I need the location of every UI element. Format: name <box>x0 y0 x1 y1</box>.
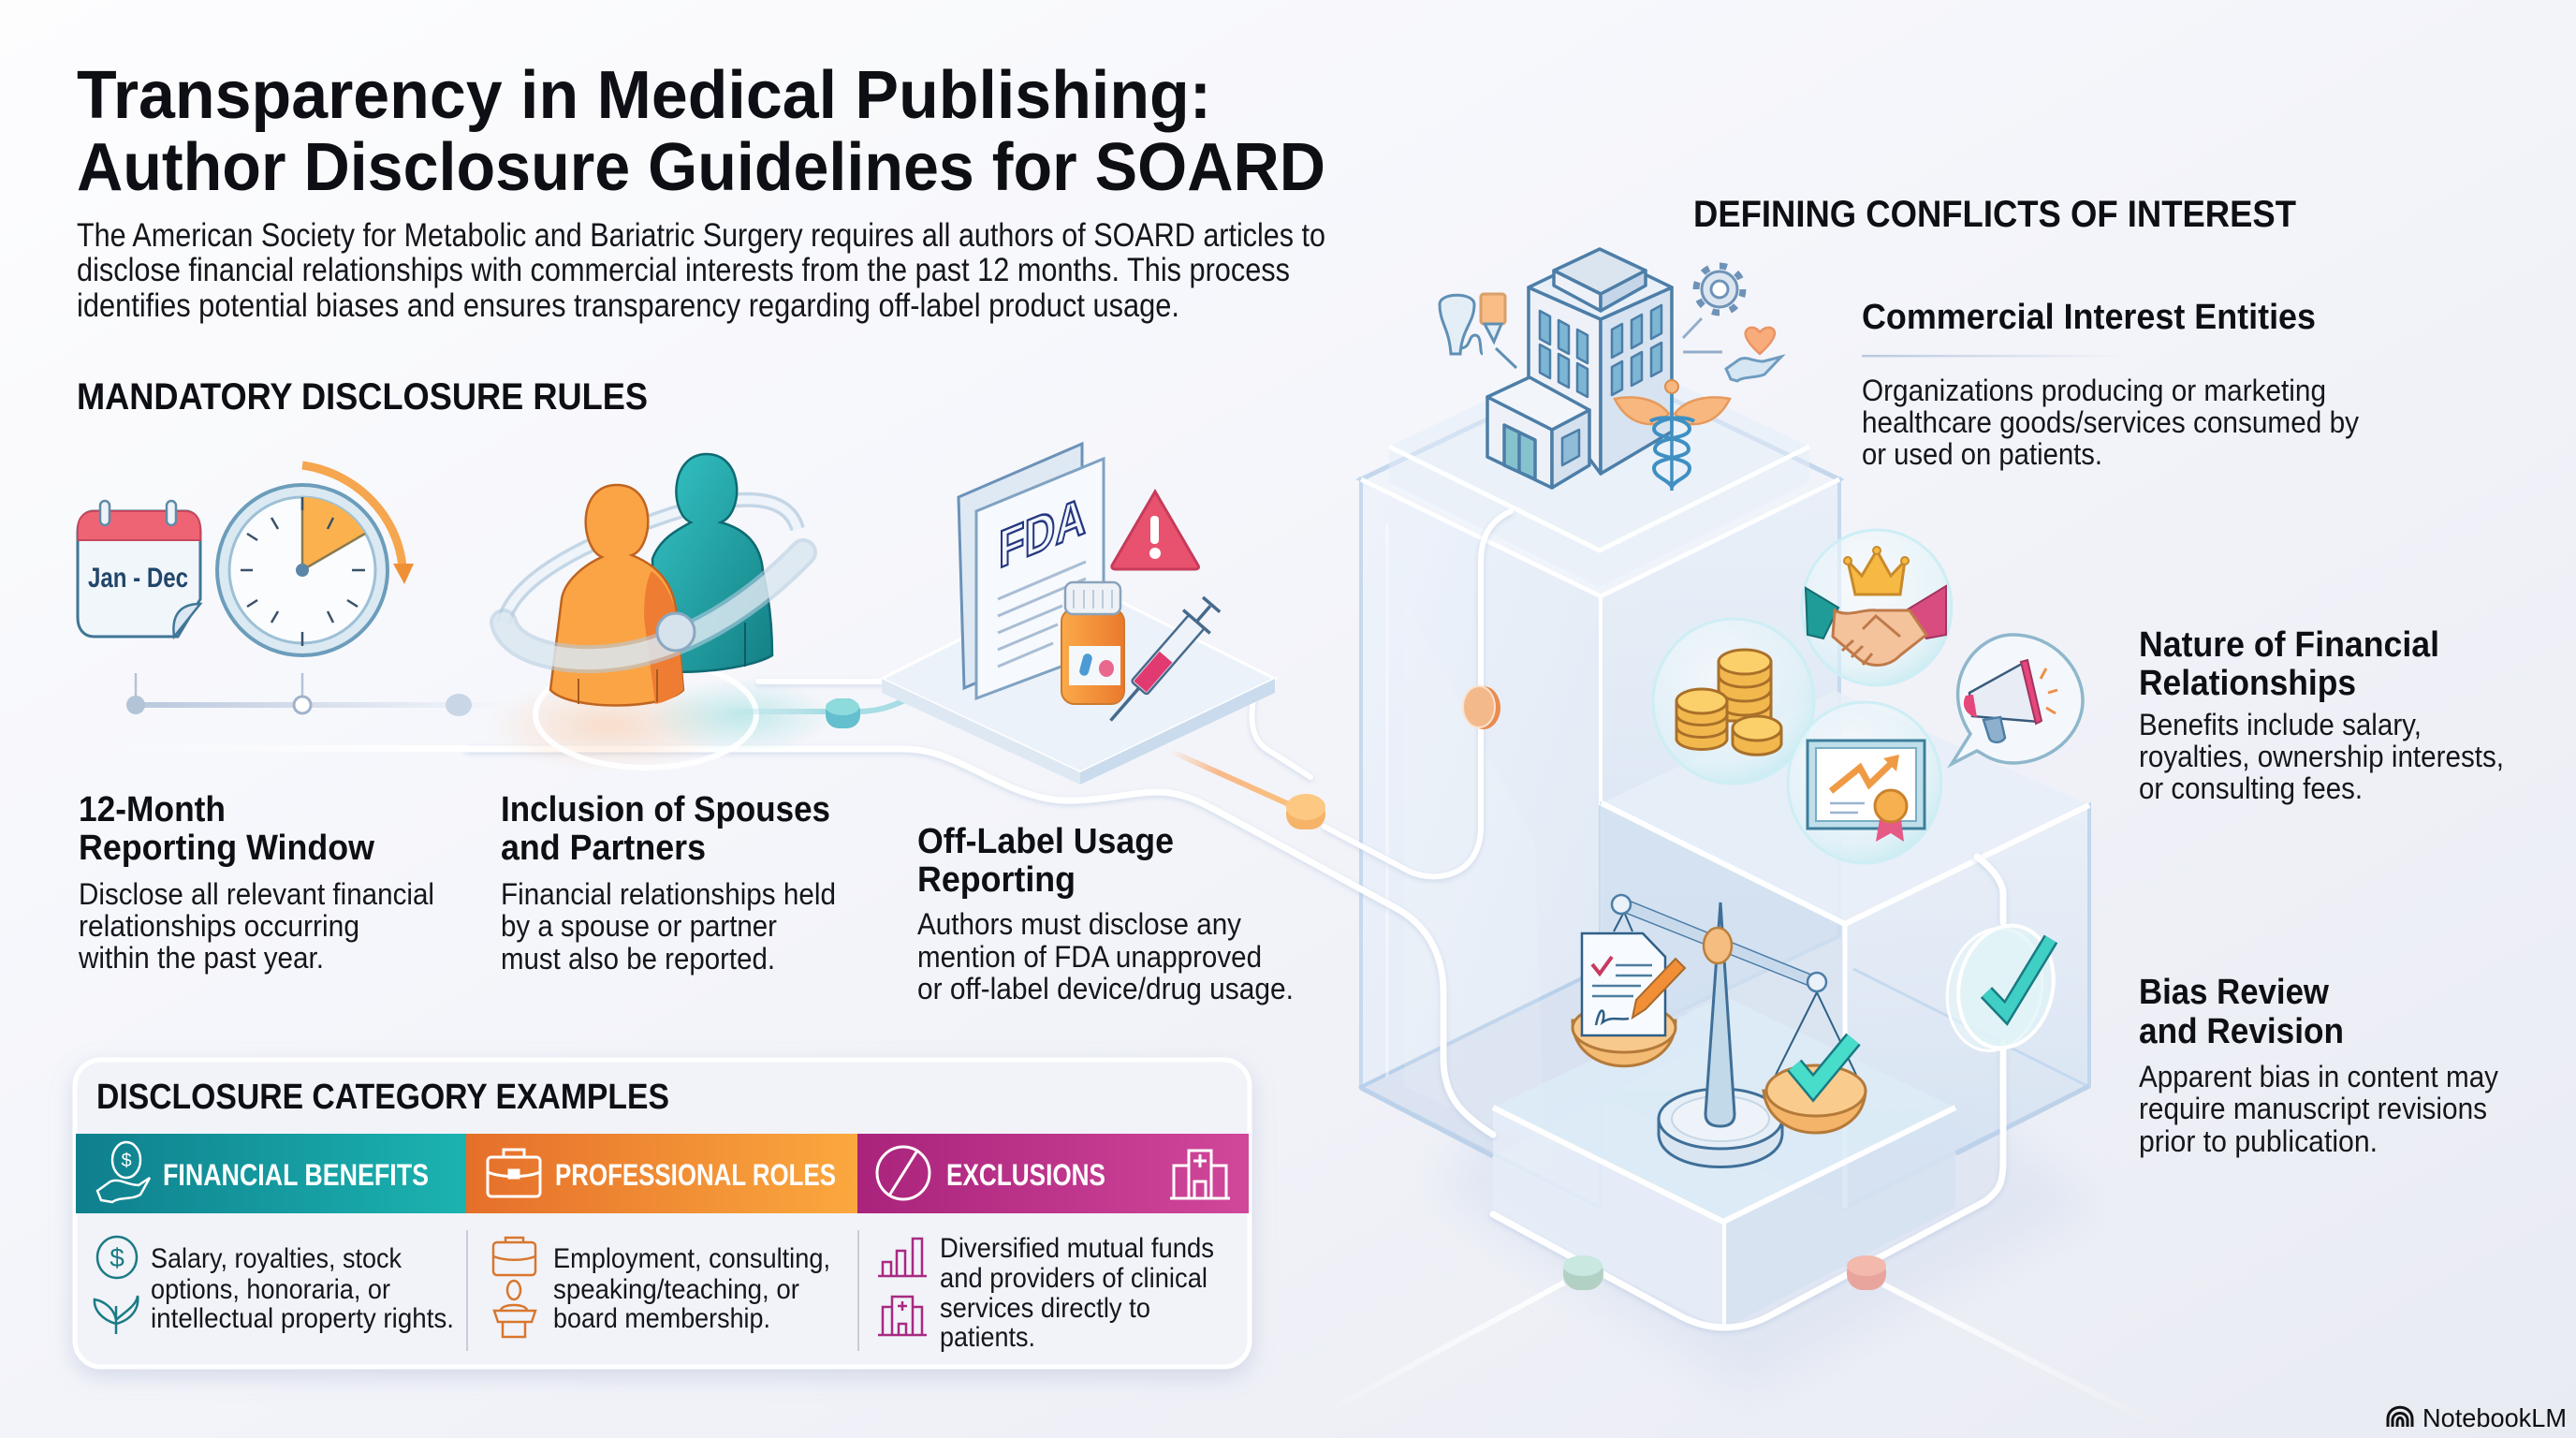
icon: leaf <box>95 1296 138 1334</box>
icon: caduceus <box>1615 380 1730 491</box>
icon: medical device <box>1440 294 1516 368</box>
icon: FDA documents: FDA <box>999 486 1086 580</box>
text: bias review and revision: prior to publication. <box>2139 1124 2378 1158</box>
icon: check disc <box>1936 917 2065 1060</box>
text: inclusion of spouses and partners: must also be reported. <box>501 942 775 976</box>
text: nature of financial relationships <box>2139 625 2504 805</box>
icon: megaphone speech bubble <box>1952 635 2083 764</box>
text: exclusions examples: Diversified mutual funds <box>940 1233 1214 1264</box>
text: professional roles examples: speaking/teaching, or <box>553 1274 799 1305</box>
header: professional roles: PROFESSIONAL ROLES <box>555 1158 836 1192</box>
text: inclusion of spouses and partners: and Partners <box>501 829 706 868</box>
text: 12-month reporting window: within the past year. <box>78 941 324 975</box>
intro paragraph: disclose financial relationships with commercial interests from the past 12 months. This process <box>77 252 1290 288</box>
text: nature of financial relationships: Benefits include salary, <box>2139 708 2422 741</box>
text: 12-month reporting window <box>78 790 434 975</box>
text: inclusion of spouses and partners <box>501 790 836 976</box>
text: off-label usage reporting <box>917 822 1294 1005</box>
heading: defining conflicts of interest: DEFINING CONFLICTS OF INTEREST <box>1693 194 2296 235</box>
icon: dollar circle: $ <box>110 1243 124 1272</box>
icon: calendar: Jan - Dec <box>88 563 188 594</box>
text: exclusions examples: and providers of clinical <box>940 1263 1208 1294</box>
text: financial benefits examples: options, honoraria, or <box>151 1274 390 1305</box>
text: professional roles examples: board membership. <box>553 1303 770 1334</box>
icon: balance scale <box>1573 895 1866 1167</box>
icon: certificate bubble <box>1788 702 1941 863</box>
text: inclusion of spouses and partners: by a spouse or partner <box>501 909 777 943</box>
icon: handshake with crown bubble <box>1802 530 1952 685</box>
text: off-label usage reporting: Authors must disclose any <box>917 907 1241 941</box>
icon: coins bubble <box>1653 619 1814 784</box>
icon: FDA documents <box>882 444 1275 785</box>
connector lines <box>468 511 2003 1328</box>
text: bias review and revision: Apparent bias in content may <box>2139 1060 2498 1093</box>
text: 12-month reporting window: 12-Month <box>79 790 226 829</box>
text: commercial interest entities: or used on patients. <box>1862 437 2102 471</box>
text: financial benefits examples: Salary, royalties, stock <box>151 1243 402 1274</box>
icon: clinic <box>878 1297 927 1335</box>
node: red pill <box>1847 1255 1886 1290</box>
header: financial benefits: $ <box>121 1151 132 1171</box>
icon: dollar circle <box>97 1237 137 1278</box>
icon: briefcase <box>493 1238 535 1275</box>
header: financial benefits: FINANCIAL BENEFITS <box>163 1158 429 1192</box>
text: inclusion of spouses and partners: Financial relationships held <box>501 877 836 911</box>
text: exclusions examples: patients. <box>940 1322 1035 1353</box>
node: orange coin <box>1463 686 1500 729</box>
text: inclusion of spouses and partners: Inclusion of Spouses <box>501 790 830 829</box>
node: orange dot <box>1170 751 1325 829</box>
cube: middle tier <box>1361 691 2089 1208</box>
text: professional roles examples: Employment, consulting, <box>553 1243 830 1274</box>
text: bias review and revision: Bias Review <box>2139 973 2329 1012</box>
icon: spouses and partners <box>487 454 833 772</box>
text: nature of financial relationships: royalties, ownership interests, <box>2139 740 2504 773</box>
text: 12-month reporting window: Reporting Window <box>79 829 374 868</box>
timeline <box>126 673 510 716</box>
title <box>77 58 1325 205</box>
text: off-label usage reporting: mention of FDA unapproved <box>917 940 1262 974</box>
cube: front tier <box>1493 996 1955 1329</box>
icon: heart in hand <box>1726 328 1781 381</box>
logo: NotebookLM: NotebookLM <box>2422 1403 2567 1432</box>
text: 12-month reporting window: Disclose all relevant financial <box>79 877 434 911</box>
text: bias review and revision <box>2139 973 2498 1158</box>
header: financial benefits <box>76 1134 466 1213</box>
text: commercial interest entities <box>1862 298 2359 471</box>
panel: disclosure category examples <box>75 1060 1250 1367</box>
icon: clock <box>217 465 414 655</box>
icon: bar chart <box>878 1239 927 1276</box>
illustration: glass tower <box>94 346 2158 1426</box>
title: Transparency in Medical Publishing: <box>77 58 1211 133</box>
text: off-label usage reporting: Off-Label Usage <box>917 822 1174 861</box>
text: exclusions examples <box>940 1233 1214 1353</box>
cube: upper tower <box>1359 346 1839 1208</box>
text: financial benefits examples: intellectual property rights. <box>151 1303 454 1334</box>
header: exclusions <box>857 1134 1249 1213</box>
heading: mandatory disclosure rules: MANDATORY DISCLOSURE RULES <box>77 376 648 418</box>
node: green pill <box>1563 1255 1603 1290</box>
icon: podium person <box>494 1281 535 1337</box>
text: commercial interest entities: Commercial Interest Entities <box>1862 298 2316 337</box>
text: professional roles examples <box>553 1243 830 1334</box>
text: nature of financial relationships: or consulting fees. <box>2139 771 2363 805</box>
text: commercial interest entities: healthcare goods/services consumed by <box>1862 405 2359 439</box>
text: 12-month reporting window: relationships occurring <box>79 909 359 943</box>
text: financial benefits examples <box>151 1243 454 1334</box>
icon: gear <box>1683 266 1743 352</box>
text: commercial interest entities: Organizations producing or marketing <box>1862 374 2326 407</box>
title: Author Disclosure Guidelines for SOARD <box>77 130 1325 205</box>
text: off-label usage reporting: or off-label device/drug usage. <box>917 972 1294 1005</box>
text: off-label usage reporting: Reporting <box>917 860 1076 900</box>
header: exclusions: EXCLUSIONS <box>946 1158 1105 1192</box>
intro paragraph <box>77 217 1325 324</box>
text: nature of financial relationships: Relationships <box>2139 664 2356 703</box>
fading line start <box>94 745 468 752</box>
heading: disclosure category examples: DISCLOSURE CATEGORY EXAMPLES <box>96 1078 669 1117</box>
text: bias review and revision: require manuscript revisions <box>2139 1092 2487 1125</box>
text: nature of financial relationships: Nature of Financial <box>2139 625 2439 665</box>
text: exclusions examples: services directly to <box>940 1293 1150 1324</box>
icon: commercial building <box>1487 249 1672 488</box>
icon: calendar <box>78 501 200 637</box>
intro paragraph: identifies potential biases and ensures transparency regarding off-label product usage. <box>77 287 1179 324</box>
connector: teal node <box>718 697 913 728</box>
intro paragraph: The American Society for Metabolic and Bariatric Surgery requires all authors of SOARD articles to <box>77 217 1325 254</box>
header: professional roles <box>466 1134 857 1213</box>
text: bias review and revision: and Revision <box>2139 1012 2344 1051</box>
